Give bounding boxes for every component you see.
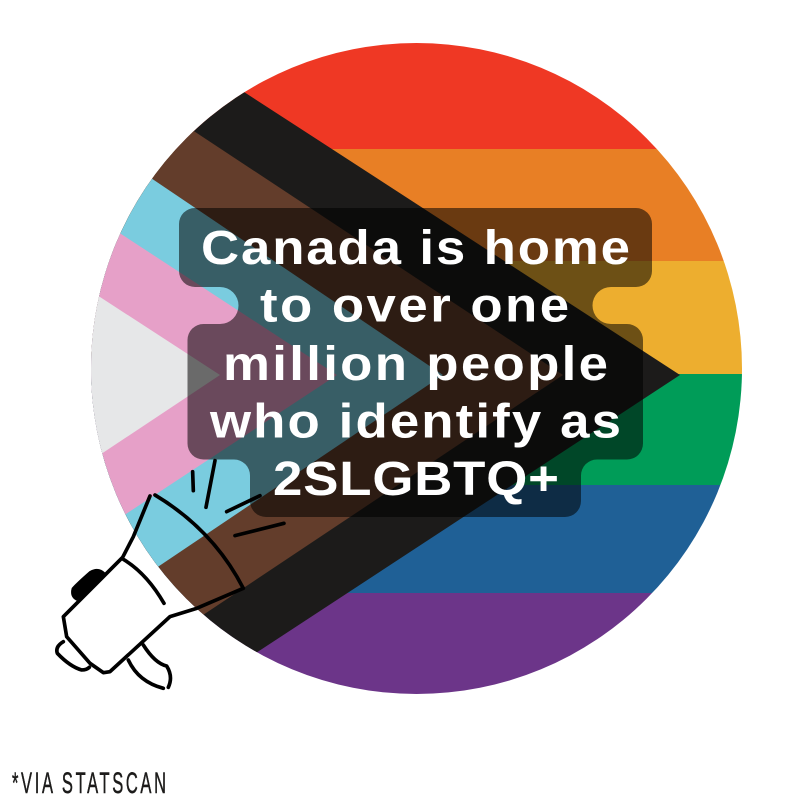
headline: 2SLGBTQ+ <box>273 451 559 505</box>
rainbow stripes <box>80 30 760 703</box>
icon: megaphone <box>57 461 284 688</box>
headline: Canada is home <box>201 220 630 274</box>
source note: *VIA STATSCAN <box>12 767 166 800</box>
headline: million people <box>223 336 608 390</box>
headline: to over one <box>260 278 569 332</box>
headline: who identify as <box>209 394 621 448</box>
headline <box>201 220 630 505</box>
chevrons <box>91 92 680 652</box>
progress pride flag circle <box>91 43 742 694</box>
text backing panel <box>179 208 652 517</box>
